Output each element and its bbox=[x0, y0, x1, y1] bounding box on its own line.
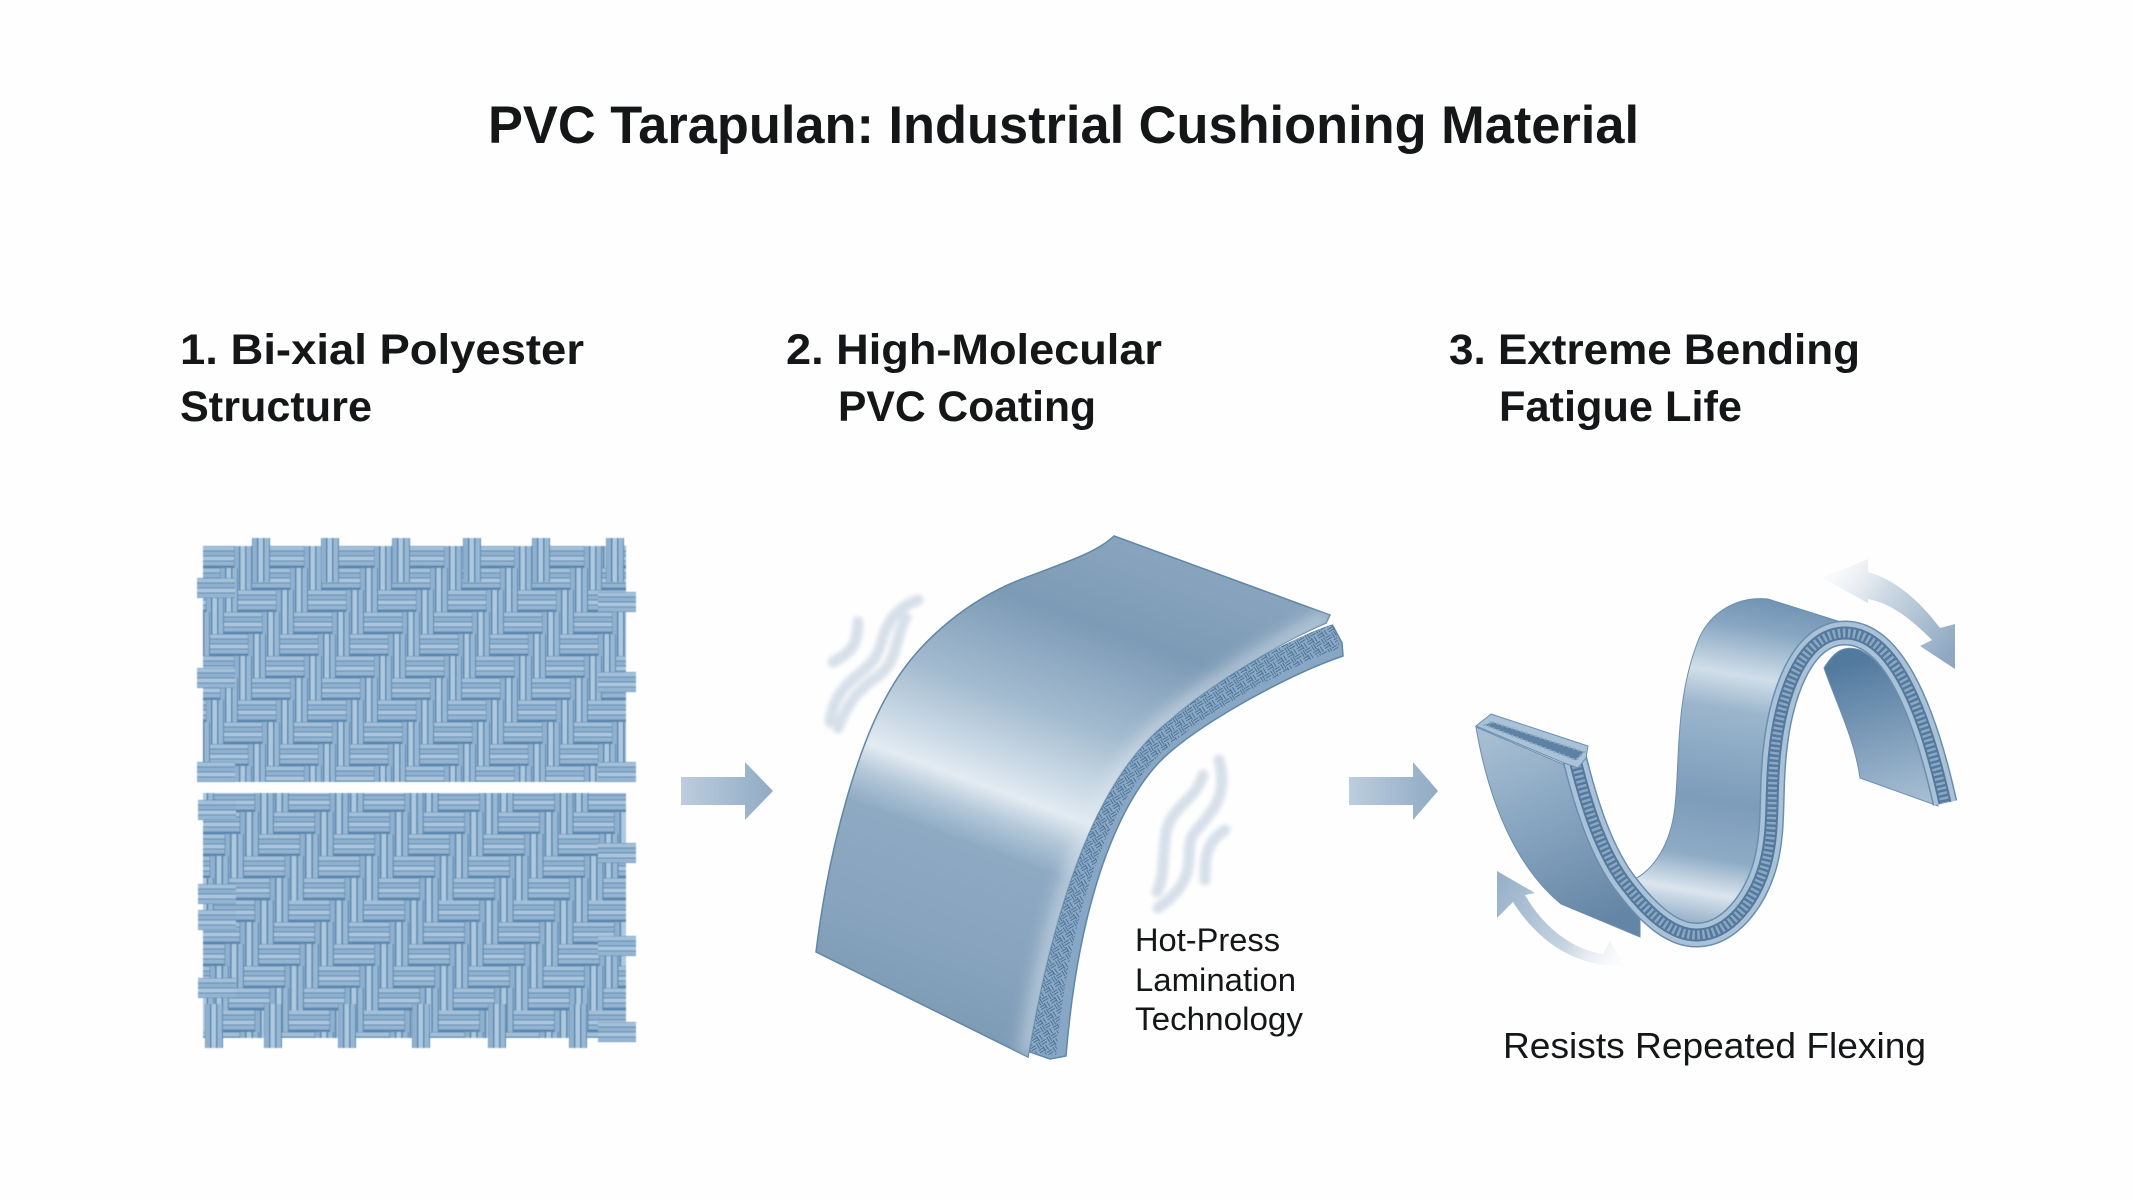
ribbon middle face bbox=[1635, 599, 1860, 935]
heading: step 2: 2. High-Molecular bbox=[786, 326, 1162, 374]
infographic canvas bbox=[181, 104, 1958, 1066]
heading: step 1 bbox=[180, 326, 584, 431]
sheet lower layer edge bbox=[1030, 626, 1343, 1059]
label: resists repeated flexing: Resists Repeated Flexing bbox=[1503, 1025, 1926, 1066]
icon: heat waves left bbox=[830, 600, 918, 728]
ribbon layered edge bbox=[1574, 633, 1945, 935]
ribbon end cross-section bbox=[1476, 714, 1588, 768]
sheet top surface bbox=[816, 536, 1330, 1057]
label: hot-press lamination: Hot-Press bbox=[1135, 922, 1280, 958]
panel: S-bent fatigue ribbon bbox=[1476, 559, 1955, 1066]
ribbon left face bbox=[1476, 727, 1640, 937]
heading: step 3: 3. Extreme Bending bbox=[1449, 326, 1860, 374]
heading: step 2 bbox=[786, 326, 1162, 431]
ribbon far face bbox=[1824, 648, 1938, 806]
panel: bi-axial polyester weave bbox=[197, 538, 636, 1048]
sheet woven core bbox=[1030, 624, 1340, 1056]
heading: step 3: Fatigue Life bbox=[1499, 383, 1742, 431]
title: PVC Tarapulan: Industrial Cushioning Material bbox=[488, 96, 1639, 155]
label: hot-press lamination: Lamination bbox=[1135, 962, 1296, 998]
panel: PVC coated sheet bbox=[816, 536, 1343, 1059]
icon: heat waves right bbox=[1157, 760, 1225, 908]
heading: step 3 bbox=[1449, 326, 1860, 431]
flex arrow: top right bbox=[1822, 559, 1955, 669]
heading: step 1: Structure bbox=[180, 383, 372, 431]
arrow: step 2 to step 3 bbox=[1349, 762, 1438, 820]
arrow: step 1 to step 2 bbox=[681, 762, 773, 820]
label: hot-press lamination: Technology bbox=[1135, 1001, 1303, 1037]
sheet edge highlight bbox=[1028, 618, 1330, 1057]
heading: step 1: 1. Bi-xial Polyester bbox=[180, 326, 584, 374]
weave swatch: lower bbox=[198, 793, 636, 1048]
heading: step 2: PVC Coating bbox=[838, 383, 1096, 431]
label: hot-press lamination bbox=[1135, 922, 1303, 1037]
flex arrow: bottom left bbox=[1497, 871, 1625, 966]
weave swatch: upper bbox=[197, 538, 636, 782]
